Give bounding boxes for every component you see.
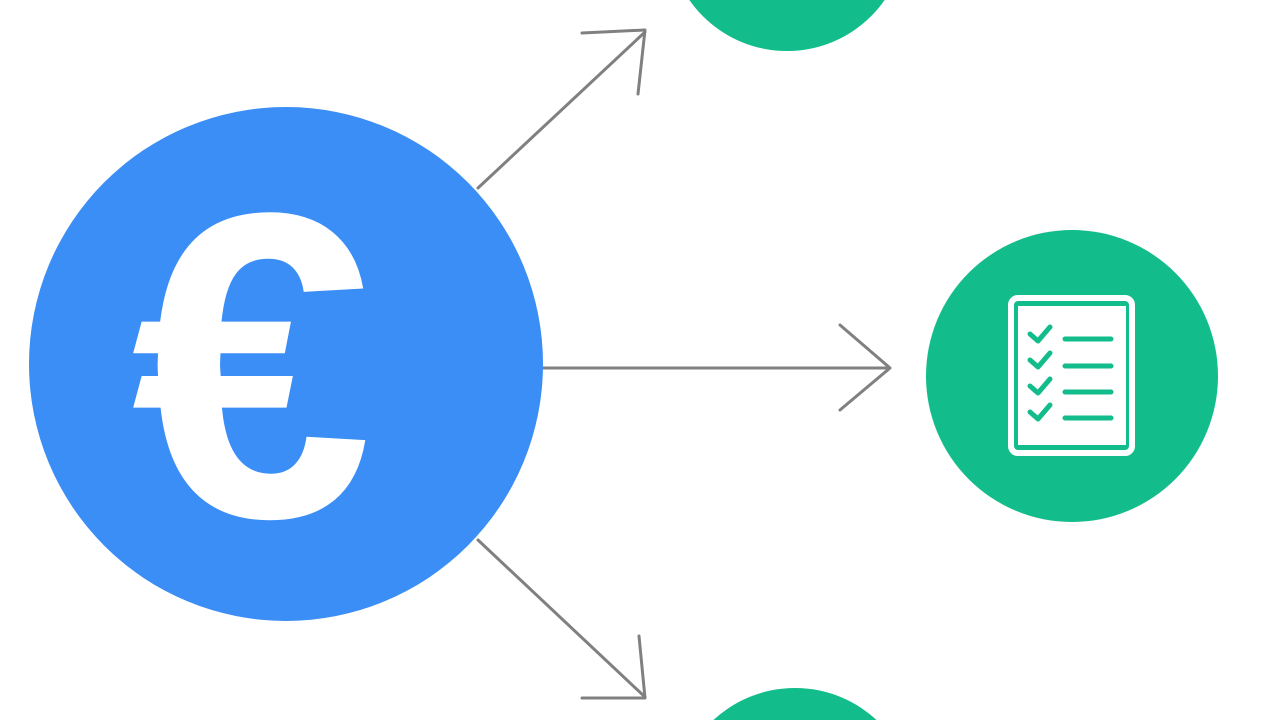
- icon: checklist: [1011, 298, 1132, 453]
- arrow: to top: [478, 30, 645, 188]
- green circle: bottom: [675, 688, 915, 720]
- green circle: top: [668, 0, 906, 51]
- icon: euro sign: €: [131, 123, 373, 609]
- arrow: to bottom: [478, 540, 645, 698]
- arrow: to middle: [540, 325, 890, 410]
- euro circle: [29, 107, 543, 621]
- checklist circle: [926, 230, 1218, 522]
